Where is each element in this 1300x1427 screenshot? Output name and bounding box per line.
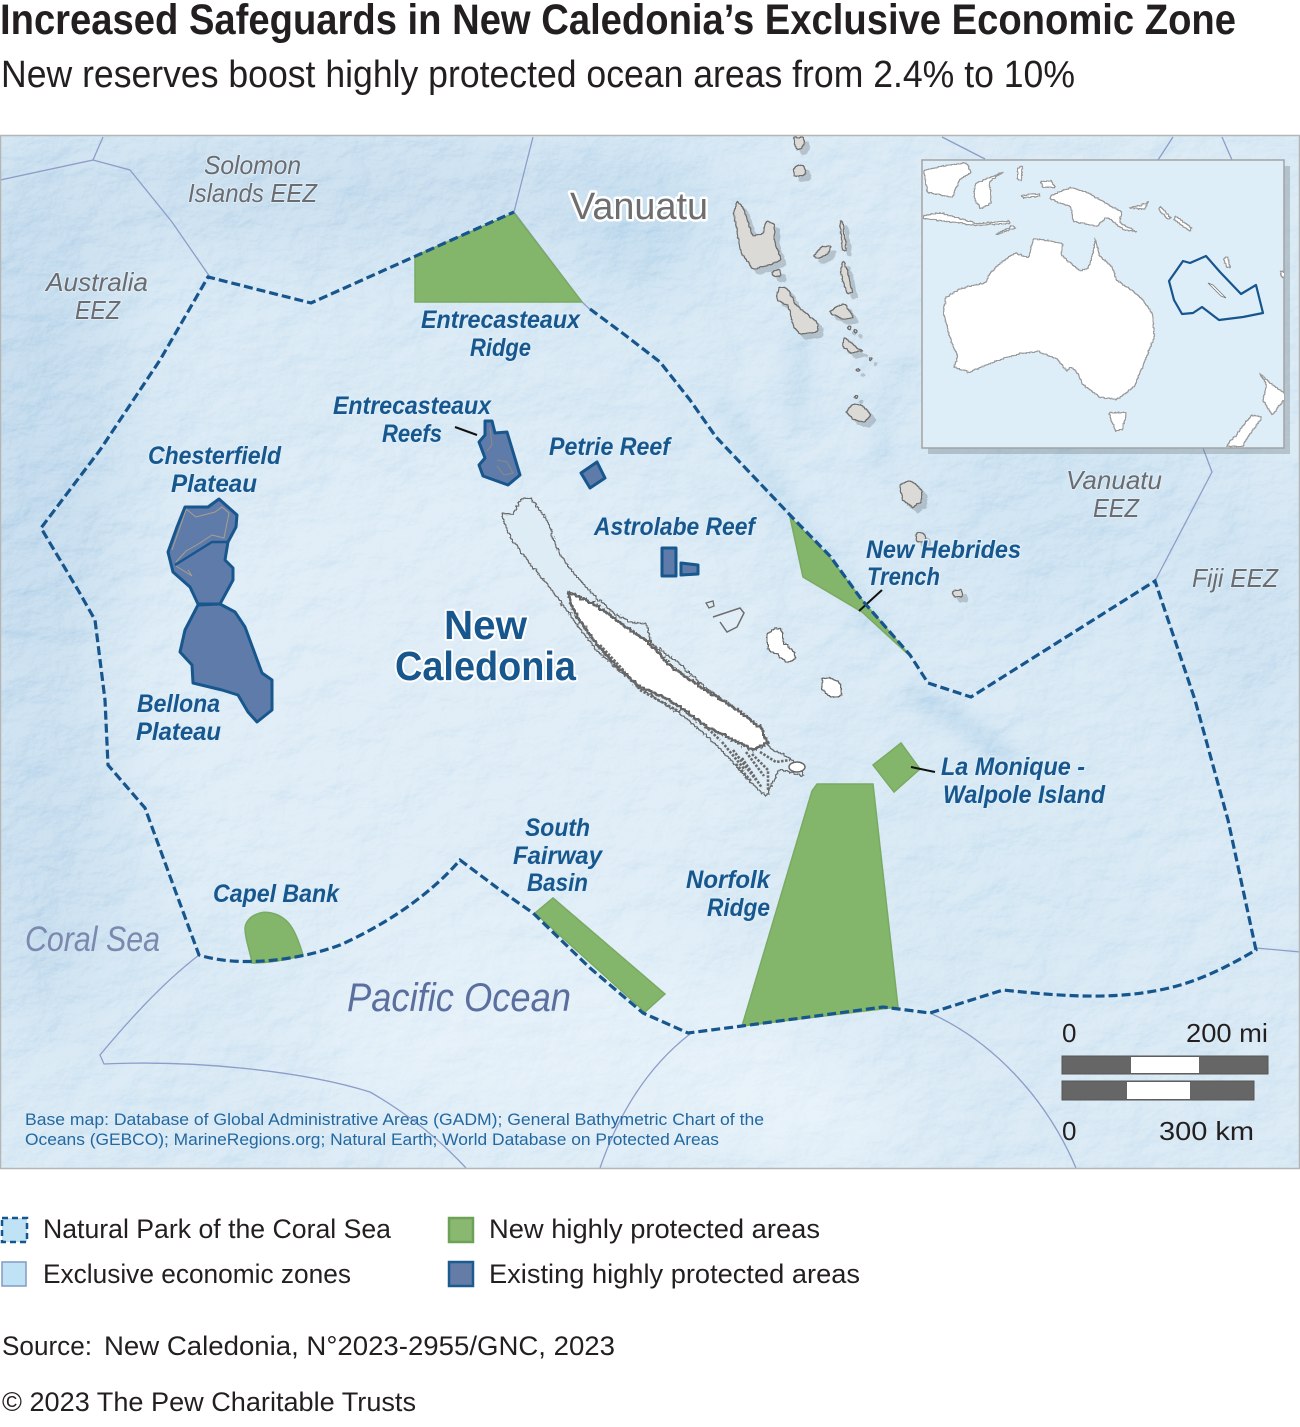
label: Solomon Islands EEZ: Solomon (204, 150, 301, 180)
label: Entrecasteaux Ridge (421, 306, 581, 362)
label: Chesterfield Plateau (148, 442, 282, 498)
label: Petrie Reef: Petrie Reef (549, 433, 672, 461)
legend item: Exclusive economic zones: Exclusive economic zones (43, 1259, 351, 1289)
label: South Fairway Basin: Fairway (513, 842, 603, 870)
label: Capel Bank: Capel Bank (213, 880, 340, 908)
label: Chesterfield Plateau: Chesterfield (148, 442, 282, 470)
base map credit: Base map: Database of Global Administrative Areas (GADM); General Bathymetric Chart of the (25, 1110, 764, 1129)
label: Entrecasteaux Ridge: Entrecasteaux (421, 306, 581, 334)
label: Astrolabe Reef: Astrolabe Reef (593, 513, 757, 541)
inset: New Caledonia (1208, 283, 1226, 298)
subtitle: New reserves boost highly protected ocean areas from 2.4% to 10% (1, 54, 1075, 96)
label: Australia EEZ: EEZ (75, 295, 121, 325)
label: South Fairway Basin: Basin (527, 869, 588, 897)
label: Coral Sea: Coral Sea (25, 920, 160, 959)
ocean bathymetry background (0, 120, 1300, 1170)
label: Vanuatu EEZ: EEZ (1093, 493, 1140, 523)
label: Entrecasteaux Reefs (333, 392, 492, 448)
label: New Hebrides Trench (866, 536, 1021, 591)
area: Bellona Plateau (180, 604, 272, 722)
label: La Monique - Walpole Island: Walpole Island (943, 781, 1106, 809)
label: Entrecasteaux Ridge: Ridge (470, 334, 531, 362)
area: Entrecasteaux Ridge (415, 213, 582, 302)
label: Australia EEZ: Australia (44, 267, 148, 297)
leader lines (455, 427, 935, 772)
scale bar: 0 (1062, 1018, 1076, 1048)
area: Capel Bank (245, 912, 303, 963)
legend item: Existing highly protected areas: Existing highly protected areas (489, 1259, 860, 1289)
area: Petrie Reef (581, 462, 605, 488)
label: Norfolk Ridge: Norfolk (686, 866, 771, 894)
scale bar: 300 km (1159, 1116, 1254, 1146)
label: Bellona Plateau: Plateau (136, 718, 221, 746)
panel: main map (0, 120, 1300, 1170)
island group: Loyalty Islands (706, 601, 842, 698)
label: Norfolk Ridge (686, 866, 771, 922)
area: Norfolk Ridge (742, 784, 898, 1026)
inset: Australia and surrounding islands (923, 162, 1285, 447)
source note: Source: (2, 1331, 92, 1361)
legend item: Natural Park of the Coral Sea: Natural Park of the Coral Sea (43, 1214, 392, 1244)
label: La Monique - Walpole Island: La Monique - (941, 753, 1085, 781)
base map credit (25, 1110, 764, 1149)
label: Vanuatu EEZ (1066, 465, 1162, 523)
label: Vanuatu EEZ: Vanuatu (1066, 465, 1162, 495)
label: Chesterfield Plateau: Plateau (171, 470, 257, 498)
dashed boundary: Natural Park of the Coral Sea (41, 212, 1256, 1033)
label: Norfolk Ridge: Ridge (707, 894, 770, 922)
label: Australia EEZ (44, 267, 148, 325)
label: La Monique - Walpole Island (941, 753, 1106, 809)
legend item: New highly protected areas: New highly protected areas (489, 1214, 820, 1244)
area: South Fairway Basin (535, 898, 665, 1012)
inset locator map (922, 160, 1290, 454)
island group: New Caledonia main island and lagoon (500, 497, 805, 798)
label: Bellona Plateau (136, 690, 221, 746)
area: Astrolabe Reef (662, 548, 698, 576)
label: Bellona Plateau: Bellona (137, 690, 220, 718)
inset: New Caledonia EEZ outline (1169, 256, 1263, 320)
scale bar: 0 (1062, 1116, 1076, 1146)
area: Chesterfield Plateau (168, 499, 237, 604)
label: New Hebrides Trench: New Hebrides (866, 536, 1021, 564)
legend (2, 1214, 860, 1289)
lagoon and reef outline (500, 497, 803, 798)
area: New Hebrides Trench (790, 517, 911, 657)
base map credit: Oceans (GEBCO); MarineRegions.org; Natural Earth; World Database on Protected Areas (25, 1130, 719, 1149)
scale bar (1062, 1018, 1268, 1146)
label: Entrecasteaux Reefs: Entrecasteaux (333, 392, 492, 420)
label: New Hebrides Trench: Trench (867, 563, 940, 591)
area: La Monique - Walpole Island (873, 743, 920, 792)
map labels (25, 150, 1279, 1020)
island group: Vanuatu (733, 137, 964, 598)
main island: Grande Terre (568, 592, 768, 750)
label: Entrecasteaux Reefs: Reefs (382, 420, 442, 448)
label: Fiji EEZ: Fiji EEZ (1192, 563, 1279, 593)
map frame (0, 136, 1300, 1168)
label: Solomon Islands EEZ: Islands EEZ (188, 178, 318, 208)
area: Entrecasteaux Reefs (479, 421, 520, 485)
label: New Caledonia: New (444, 602, 527, 648)
island: Isle of Pines (789, 762, 805, 772)
label: Vanuatu: Vanuatu (570, 186, 708, 228)
source note: New Caledonia, N°2023-2955/GNC, 2023 (104, 1331, 615, 1361)
existing highly protected areas (168, 421, 698, 722)
label: New Caledonia (395, 602, 577, 689)
label: New Caledonia: Caledonia (395, 643, 577, 689)
EEZ boundary lines (0, 137, 1300, 1168)
new highly protected areas (245, 213, 920, 1026)
label: South Fairway Basin (513, 814, 603, 897)
copyright: © 2023 The Pew Charitable Trusts (2, 1387, 416, 1417)
label: Pacific Ocean: Pacific Ocean (347, 976, 571, 1020)
scale bar: 200 mi (1186, 1018, 1268, 1048)
label: South Fairway Basin: South (525, 814, 590, 842)
label: Solomon Islands EEZ (188, 150, 318, 208)
